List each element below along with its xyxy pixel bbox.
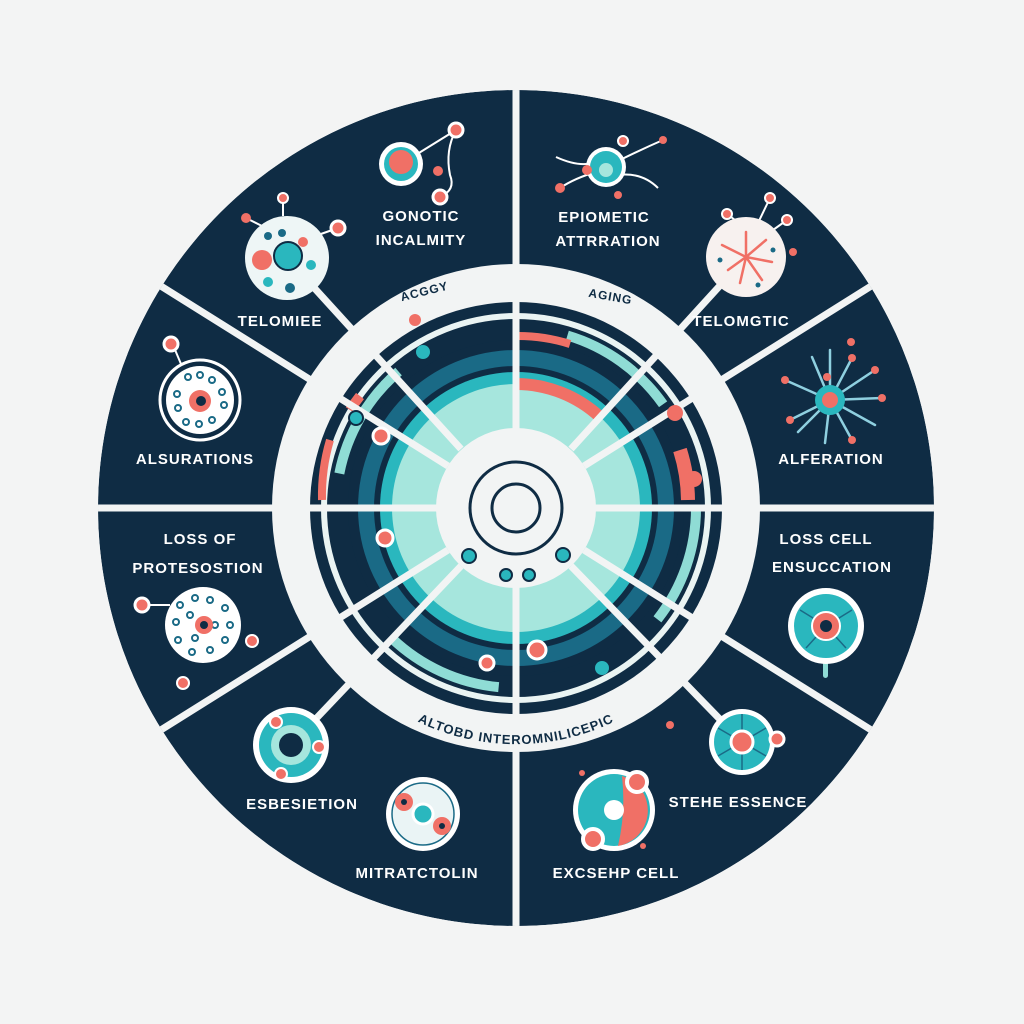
inner ring system bbox=[272, 264, 760, 752]
icon: epigenetic bbox=[555, 136, 667, 199]
section labels bbox=[132, 208, 892, 882]
icon: alsurations bbox=[160, 337, 240, 440]
icon: genomic bbox=[379, 123, 463, 204]
section labels: ATTRRATION bbox=[555, 233, 661, 250]
icon: telomgtic bbox=[706, 193, 797, 297]
icon: stem essence bbox=[709, 709, 784, 775]
section labels: PROTESOSTION bbox=[132, 560, 264, 577]
inner ring labels: AGING bbox=[587, 286, 634, 307]
section labels: EXCSEHP CELL bbox=[553, 865, 679, 882]
section labels: MITRATCTOLIN bbox=[355, 865, 479, 882]
section labels: ESBESIETION bbox=[246, 796, 358, 813]
section labels: ALSURATIONS bbox=[136, 451, 254, 468]
section labels: ENSUCCATION bbox=[772, 559, 892, 576]
section labels: TELOMGTIC bbox=[692, 313, 790, 330]
outer wheel bbox=[90, 80, 940, 940]
coral arcs bbox=[516, 384, 600, 417]
section labels: EPIOMETIC bbox=[558, 209, 650, 226]
inner ring labels: ACGGY bbox=[399, 279, 450, 304]
section labels: INCALMITY bbox=[376, 232, 466, 249]
section labels: LOSS CELL bbox=[779, 531, 873, 548]
icon: mitochondria bbox=[386, 777, 460, 851]
inner ring labels: ALTOBD INTEROMNILICEPIC bbox=[418, 714, 612, 744]
icon: loss cell bbox=[788, 588, 864, 678]
section labels: LOSS OF bbox=[164, 531, 236, 548]
section labels: GONOTIC bbox=[382, 208, 460, 225]
icon: alferation neuron bbox=[781, 338, 886, 444]
icon: proteostasis bbox=[135, 587, 258, 689]
section labels: TELOMIEE bbox=[238, 313, 322, 330]
icon: exhausted cell bbox=[573, 721, 674, 851]
section labels: ALFERATION bbox=[778, 451, 884, 468]
section labels: STEHE ESSENCE bbox=[669, 794, 807, 811]
spokes bbox=[90, 80, 940, 940]
inner dots bbox=[349, 314, 702, 675]
icon: telomere bbox=[241, 193, 345, 300]
inner ring labels bbox=[399, 279, 645, 776]
center target bbox=[470, 462, 562, 554]
icon: esbesiection bbox=[253, 707, 329, 783]
